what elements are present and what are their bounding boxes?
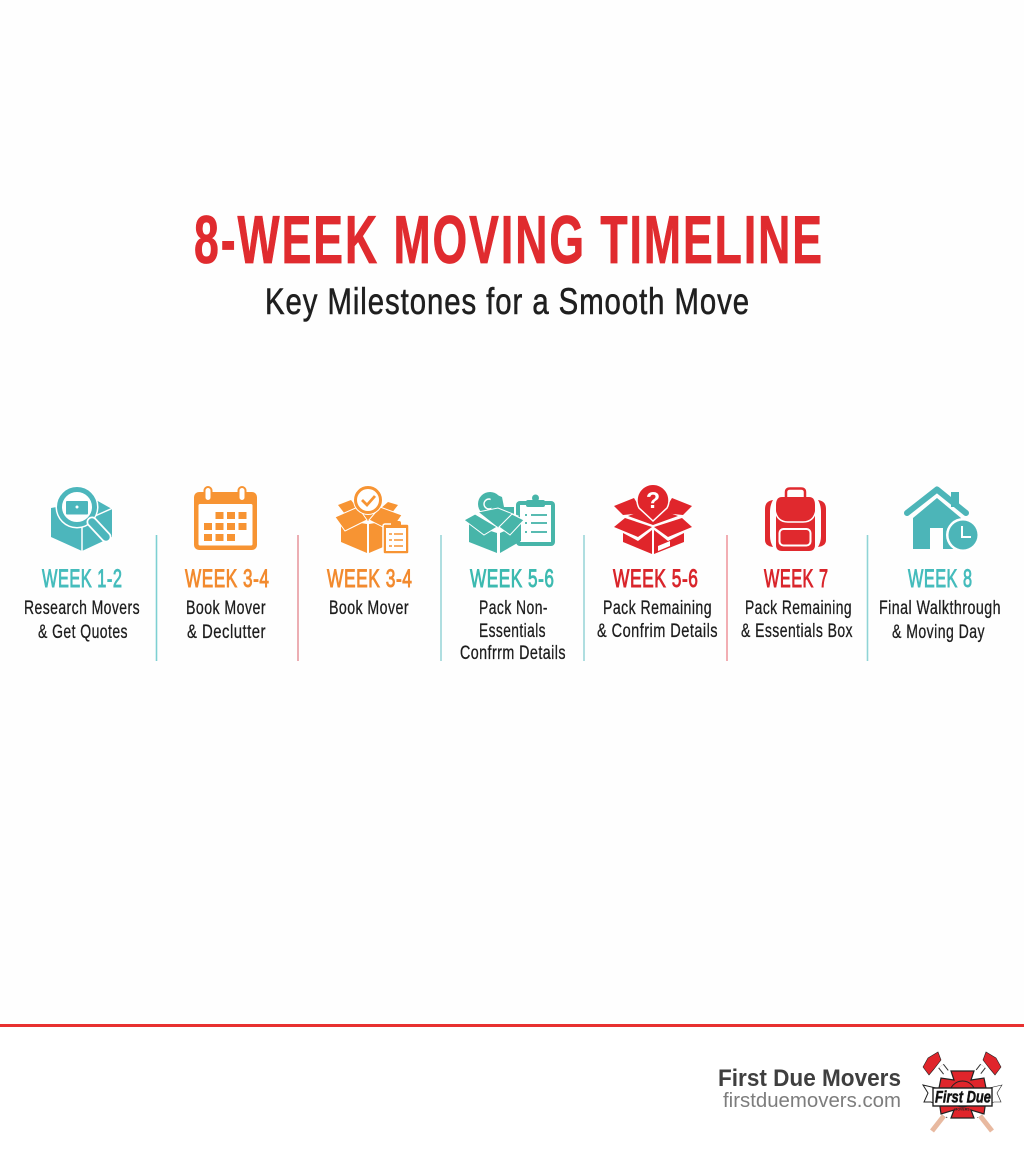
description: pack remaining and confirm: & Confrim Details — [597, 621, 718, 642]
icon: backpack — [765, 488, 826, 551]
panel: week 7 — [741, 488, 853, 642]
description: research movers: & Get Quotes — [38, 622, 128, 643]
icon: box with check and clipboard — [335, 485, 409, 554]
label: week 3-4: WEEK 3-4 — [327, 565, 412, 593]
icon: house with clock — [907, 490, 980, 552]
website: firstduemovers.com — [723, 1089, 901, 1112]
panel: week 3-4 calendar — [185, 487, 270, 643]
description: research movers: Research Movers — [24, 598, 140, 619]
description: research movers — [24, 598, 140, 643]
icon: box with magnifier — [51, 486, 113, 551]
description: pack non-essentials — [460, 598, 566, 664]
label: week 3-4: WEEK 3-4 — [185, 565, 270, 593]
divider lines — [156, 535, 868, 661]
description: pack remaining and confirm — [597, 598, 718, 642]
icon: box with question pin — [614, 484, 692, 554]
label: week 5-6: WEEK 5-6 — [613, 565, 698, 593]
panel: week 5-6 remaining — [597, 484, 718, 642]
description: book mover and declutter — [186, 598, 266, 643]
brand name: First Due Movers — [718, 1065, 901, 1092]
subtitle: Key Milestones for a Smooth Move — [265, 281, 750, 322]
panel: week 3-4 box — [327, 485, 412, 619]
icon: box with tape and clipboard — [464, 492, 555, 553]
panel: week 8 — [879, 490, 1001, 643]
description: book mover and declutter: Book Mover — [186, 598, 266, 619]
description: pack remaining and essentials: & Essentials Box — [741, 621, 853, 642]
footer — [0, 1024, 1024, 1154]
panel: week 5-6 non-essentials — [460, 492, 566, 664]
panel: week 1-2 — [24, 486, 140, 643]
description: book mover and declutter: & Declutter — [187, 622, 266, 643]
description: pack remaining and essentials — [741, 598, 853, 642]
label: week 5-6: WEEK 5-6 — [470, 565, 554, 593]
description: final walkthrough: & Moving Day — [892, 622, 985, 643]
label: week 8: WEEK 8 — [908, 565, 972, 593]
label: week 7: WEEK 7 — [764, 565, 828, 593]
label: week 1-2: WEEK 1-2 — [42, 565, 122, 593]
description: pack non-essentials: Essentials — [479, 621, 546, 642]
description: book mover: Book Mover — [329, 598, 409, 619]
logo — [923, 1052, 1002, 1131]
description: pack non-essentials: Confrrm Details — [460, 643, 566, 664]
description: pack remaining and essentials: Pack Remaining — [745, 598, 852, 619]
description: final walkthrough — [879, 598, 1001, 643]
description: pack remaining and confirm: Pack Remaining — [603, 598, 712, 619]
icon: calendar — [194, 487, 257, 550]
logo: First Due — [935, 1088, 991, 1106]
logo: MOVERS — [954, 1108, 970, 1112]
description: pack non-essentials: Pack Non- — [479, 598, 548, 619]
icon: box with question pin: ? — [646, 487, 660, 513]
